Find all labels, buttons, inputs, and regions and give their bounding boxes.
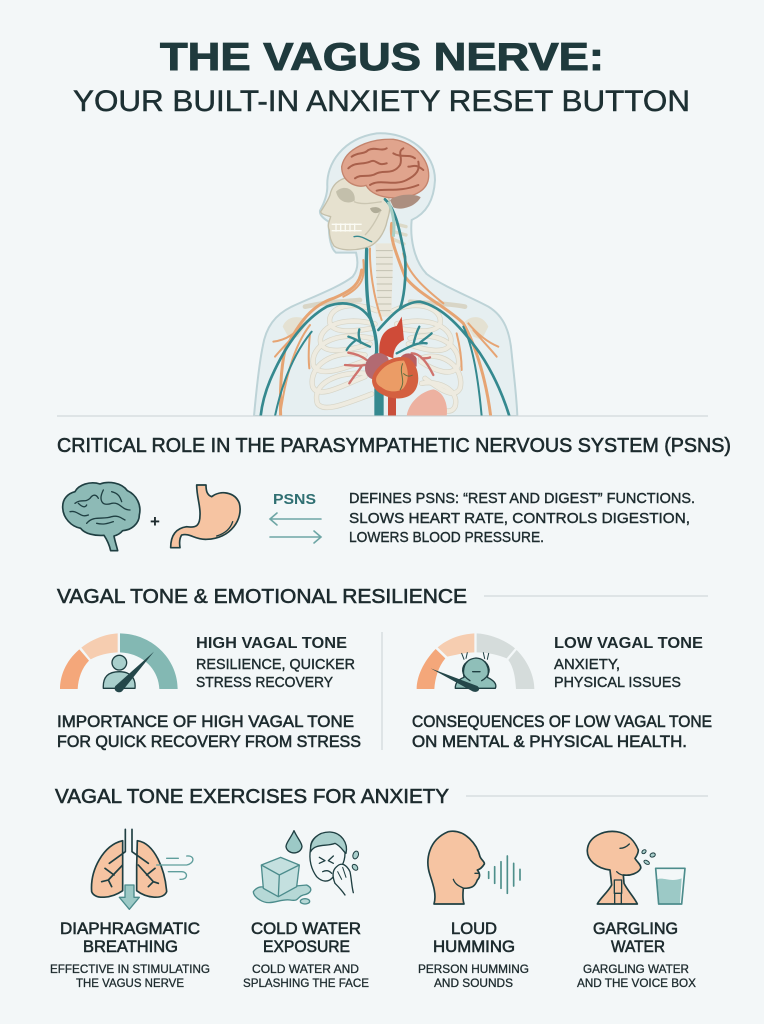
exercise: loud humming: [418, 831, 529, 990]
text block: importance of high vagal tone: [57, 712, 361, 751]
text block: PSNS definition: DEFINES PSNS: “REST AND DIGEST” FUNCTIONS.: [349, 490, 695, 507]
text block: PSNS definition: [349, 490, 695, 546]
text block: low vagal tone: ANXIETY,: [554, 656, 620, 673]
text block: PSNS definition: SLOWS HEART RATE, CONTROLS DIGESTION,: [349, 510, 690, 527]
text block: PSNS definition: LOWERS BLOOD PRESSURE.: [349, 529, 544, 546]
text block: high vagal tone: RESILIENCE, QUICKER: [196, 656, 355, 673]
title: [73, 36, 690, 118]
spine: [375, 243, 393, 317]
text block: low vagal tone: PHYSICAL ISSUES: [554, 674, 681, 691]
icon: head with sound waves: [428, 831, 520, 904]
skull: [321, 176, 390, 250]
heart: [379, 317, 404, 358]
text block: low vagal tone: [554, 635, 703, 691]
label: [577, 919, 696, 990]
body silhouette: [254, 133, 517, 416]
panel: PSNS critical role: [57, 435, 731, 551]
panel: exercises: [50, 786, 708, 990]
orange nerves: [273, 223, 498, 416]
text block: consequences of low vagal tone: CONSEQUENCES OF LOW VAGAL TONE: [412, 712, 712, 731]
icon: stomach: [171, 485, 240, 548]
title: YOUR BUILT-IN ANXIETY RESET BUTTON: [73, 85, 690, 118]
label: GARGLING WATER: [583, 962, 689, 976]
plus sign: +: [150, 512, 160, 531]
nerve crossing over the aorta: [378, 302, 509, 416]
vagus nerve branches: [261, 199, 482, 416]
label: AND THE VOICE BOX: [577, 976, 696, 990]
shoulder bones: [305, 300, 465, 307]
exercise: gargling water: [577, 831, 696, 990]
icon: ice cube and splashing face: [253, 831, 360, 904]
label: DIAPHRAGMATIC: [60, 919, 200, 938]
text block: high vagal tone: HIGH VAGAL TONE: [196, 635, 347, 652]
text block: consequences of low vagal tone: [412, 712, 712, 751]
label: WATER: [611, 937, 665, 956]
title: THE VAGUS NERVE:: [160, 36, 604, 79]
label: COLD WATER: [251, 919, 361, 938]
label: BREATHING: [83, 937, 178, 956]
exercise: diaphragmatic breathing: [50, 829, 210, 990]
text block: high vagal tone: STRESS RECOVERY: [196, 674, 333, 691]
arrows and PSNS label: [270, 491, 321, 543]
heading: VAGAL TONE EXERCISES FOR ANXIETY: [55, 786, 449, 808]
gauge: low vagal tone: [417, 633, 534, 692]
gauge: high vagal tone: [60, 633, 178, 692]
label: [243, 919, 369, 990]
stomach: [407, 389, 447, 416]
icon: gargling head and glass: [587, 831, 685, 904]
text block: importance of high vagal tone: FOR QUICK RECOVERY FROM STRESS: [57, 732, 361, 751]
label: HUMMING: [433, 937, 515, 956]
label: COLD WATER AND: [252, 962, 359, 976]
heading: VAGAL TONE & EMOTIONAL RESILIENCE: [57, 586, 467, 608]
illustration: human anatomy with vagus nerve: [254, 133, 517, 416]
label: PERSON HUMMING: [418, 962, 529, 976]
pulmonary branches: [345, 353, 433, 383]
label: LOUD: [451, 919, 497, 938]
heading: CRITICAL ROLE IN THE PARASYMPATHETIC NERVOUS SYSTEM (PSNS): [57, 435, 731, 457]
label: [50, 919, 210, 990]
text block: low vagal tone: LOW VAGAL TONE: [554, 635, 703, 652]
label: THE VAGUS NERVE: [76, 976, 184, 990]
label: EFFECTIVE IN STIMULATING: [50, 962, 210, 976]
label: [418, 919, 529, 990]
icon: brain: [63, 482, 140, 551]
ribs: [312, 305, 461, 411]
divider: [57, 415, 708, 417]
label: EXPOSURE: [263, 937, 350, 956]
panel: vagal tone: [57, 586, 712, 751]
text block: importance of high vagal tone: IMPORTANCE OF HIGH VAGAL TONE: [57, 712, 354, 731]
text block: high vagal tone: [196, 635, 355, 691]
label: AND SOUNDS: [434, 976, 513, 990]
exercise: cold water exposure: [243, 831, 369, 990]
text block: consequences of low vagal tone: ON MENTAL & PHYSICAL HEALTH.: [412, 732, 687, 751]
brain: [342, 139, 429, 198]
label: SPLASHING THE FACE: [243, 976, 369, 990]
arrows and PSNS label: PSNS: [273, 491, 316, 508]
icon: lungs: [92, 829, 193, 909]
aorta below heart: [388, 397, 396, 416]
label: GARGLING: [593, 919, 678, 938]
